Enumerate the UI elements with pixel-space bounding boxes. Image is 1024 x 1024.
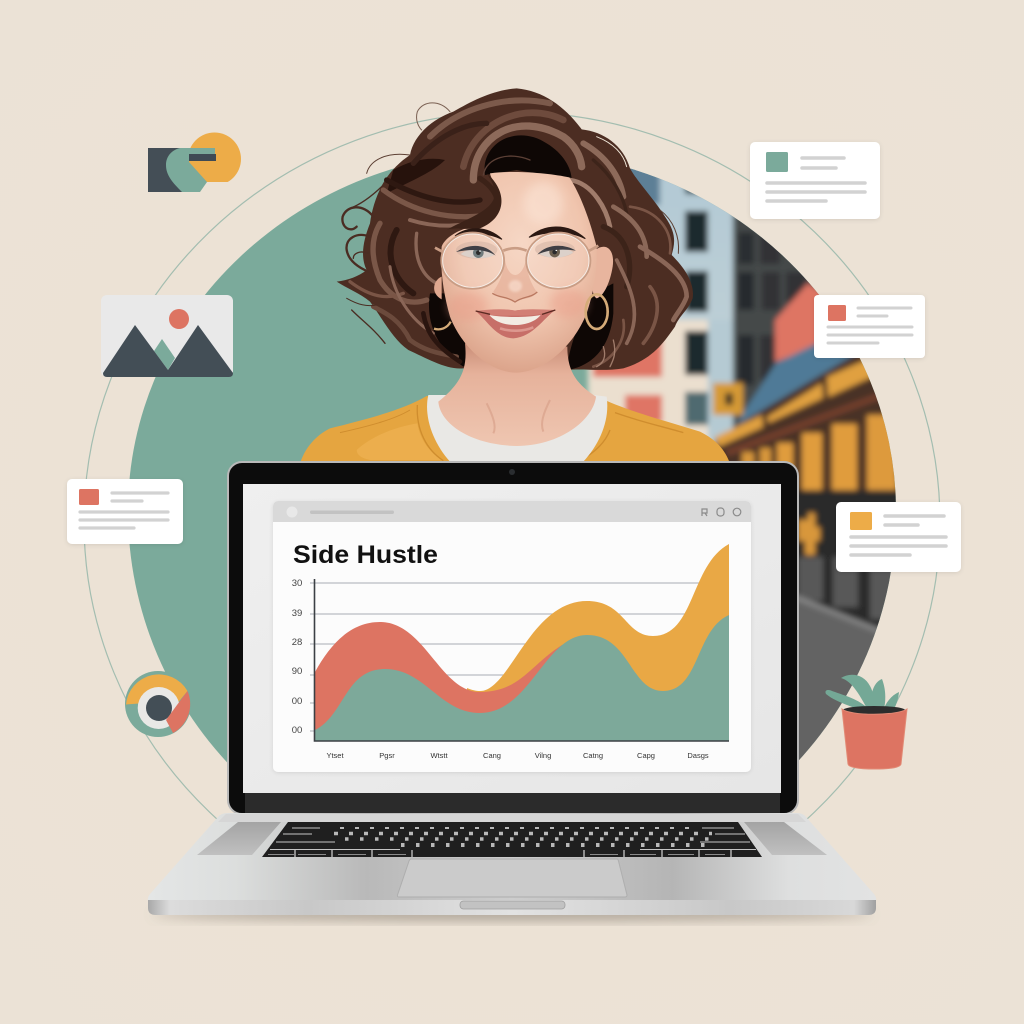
laptop lid bezel: [228, 462, 798, 814]
right ear: [592, 247, 613, 298]
y-axis labels: 00: [292, 696, 302, 707]
nose: [492, 260, 537, 302]
gridlines: [310, 583, 729, 731]
y-axis labels: 90: [292, 666, 302, 677]
x-axis labels: Ytset: [326, 751, 344, 760]
right speaker grille: [744, 822, 827, 855]
y-axis labels: 00: [292, 725, 302, 736]
orbit ring: [84, 115, 940, 819]
sweater fold highlights: [340, 405, 683, 461]
plant leaves: [825, 675, 899, 719]
forelock over forehead: [447, 173, 502, 230]
floating card: lower right: [836, 502, 961, 572]
webcam: [509, 469, 515, 475]
chart title: Side Hustle: [293, 541, 438, 569]
keyboard: [262, 822, 762, 857]
floating icon: image placeholder: [101, 295, 233, 377]
smile: [476, 309, 555, 338]
app window: [273, 501, 751, 772]
face: [441, 172, 597, 373]
top deck highlight: [218, 814, 806, 822]
terracotta pot: [842, 709, 907, 769]
x-axis labels: Dasgs: [687, 751, 709, 760]
orange series area: [467, 544, 729, 741]
x-axis labels: Capg: [637, 751, 655, 760]
left eye: [456, 241, 497, 259]
hair silhouette: [337, 88, 693, 370]
y-axis labels: 30: [292, 578, 302, 589]
x-axis labels: Wtstt: [430, 751, 448, 760]
laptop base shadow: [152, 908, 872, 920]
left hoop earring: [434, 322, 451, 329]
right eye: [535, 241, 576, 258]
laptop hinge: [245, 793, 780, 813]
teal series area: [315, 615, 729, 741]
floating card: middle right: [814, 295, 925, 358]
hair dark shadows: [387, 135, 613, 370]
y-axis labels: 28: [292, 637, 302, 648]
x-axis labels: Pgsr: [379, 751, 395, 760]
x-axis labels: Vilng: [535, 751, 551, 760]
right eyebrow: [529, 227, 585, 239]
laptop: [148, 462, 876, 915]
round glasses: [435, 233, 598, 288]
cheek blush: [448, 182, 587, 322]
x-axis labels: Cang: [483, 751, 501, 760]
x-axis labels: Catng: [583, 751, 603, 760]
blurred city street scene: [584, 168, 896, 760]
teal backdrop disc: [128, 151, 896, 886]
lid notch: [460, 901, 565, 909]
floating icon: donut chart: [125, 671, 191, 737]
hair strands: [342, 100, 687, 367]
right hoop earring: [586, 294, 608, 329]
trackpad: [397, 859, 627, 897]
left speaker grille: [197, 822, 281, 855]
app top bar: [273, 501, 751, 522]
neck tendon shading: [487, 400, 550, 433]
front edge: [148, 900, 876, 915]
floating card: left: [67, 479, 183, 544]
neck: [438, 343, 596, 446]
floating icon: potted plant: [825, 675, 907, 769]
left ear: [434, 277, 442, 299]
portrait of smiling woman: [300, 88, 730, 463]
chart axes: [314, 579, 729, 741]
y-axis labels: 39: [292, 608, 302, 619]
white t-shirt collar: [427, 395, 607, 462]
floating card: top right: [750, 142, 880, 219]
screen: [243, 484, 781, 793]
left eyebrow: [455, 229, 502, 239]
y-axis labels: [292, 578, 302, 736]
floating icon: overlapping shapes: [148, 132, 243, 194]
mustard sweater: [300, 396, 730, 463]
x-axis labels: [326, 751, 709, 760]
laptop deck: [148, 813, 876, 901]
red series area: [315, 622, 562, 741]
pot rim opening: [843, 706, 905, 714]
